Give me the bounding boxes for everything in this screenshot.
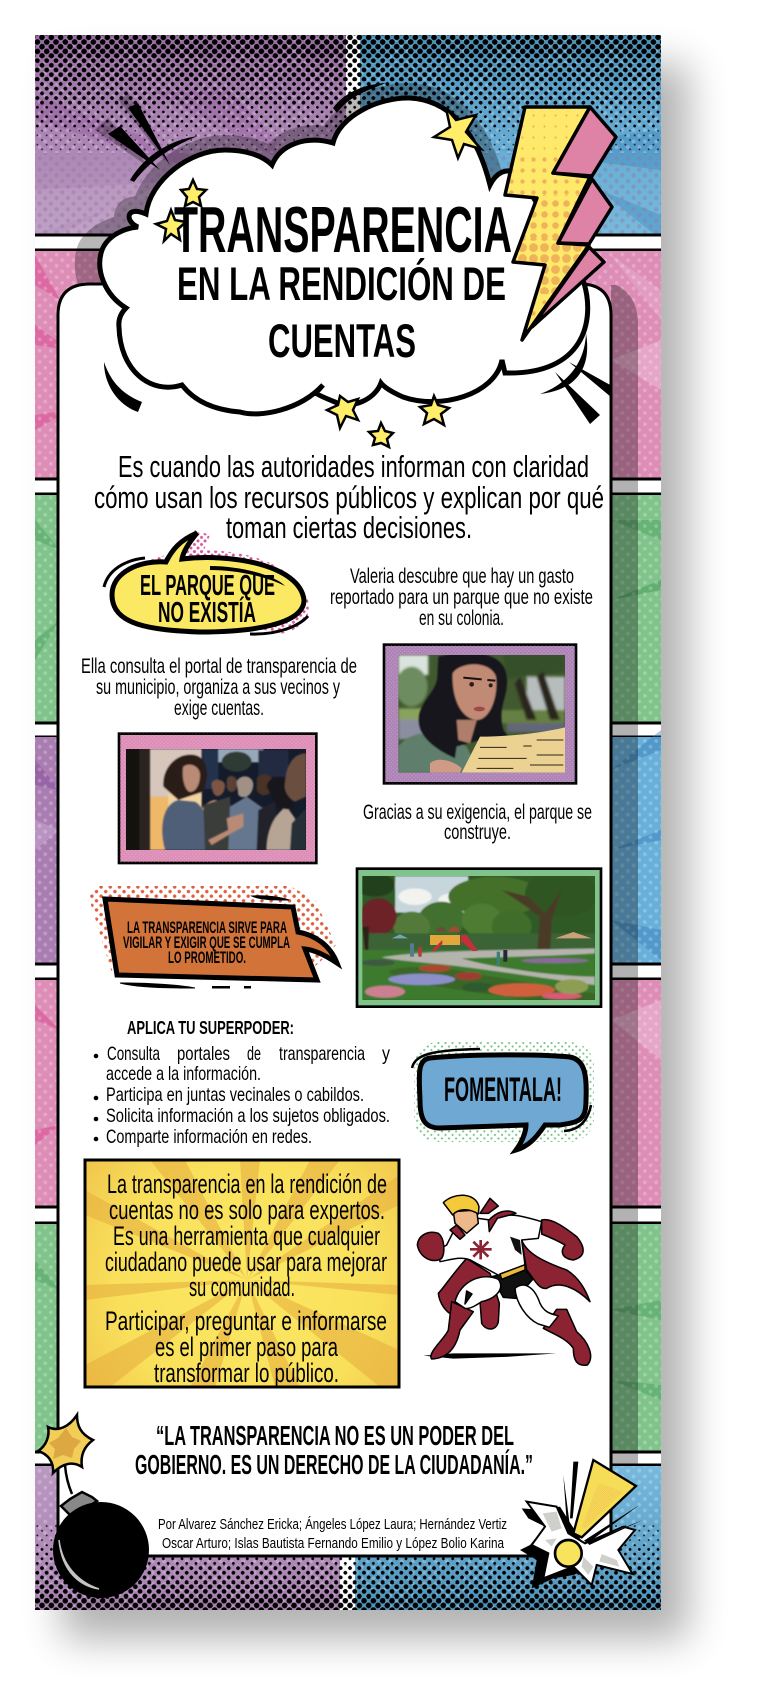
panel: top purple <box>35 35 346 234</box>
stars <box>156 108 481 447</box>
text: Gracias <box>363 801 592 844</box>
cloud <box>100 83 588 414</box>
text: Gracias: construye. <box>444 821 511 844</box>
message text: transformar lo público. <box>154 1358 339 1388</box>
band white <box>25 235 671 250</box>
credits: Oscar Arturo; Islas Bautista Fernando Emilio y López Bolio Karina <box>162 1535 505 1552</box>
message text: Es una herramienta que cualquier <box>113 1221 380 1251</box>
panel: pink row <box>35 251 661 478</box>
panel: pink row 2 <box>35 980 661 1207</box>
message text: cuentas no es solo para expertos. <box>109 1195 385 1225</box>
panel: top blue <box>360 35 661 240</box>
white panel shadow <box>611 285 638 1465</box>
list: superpoder actions: portales <box>177 1043 230 1065</box>
white content panel <box>58 284 611 1556</box>
band white <box>25 1207 671 1223</box>
intro text: toman ciertas decisiones. <box>226 510 472 545</box>
band white <box>25 1452 671 1465</box>
bubble: el parque que no existía <box>104 530 309 634</box>
halftone top dots <box>35 35 661 234</box>
list: superpoder actions: y <box>382 1043 390 1065</box>
title: EN LA RENDICIÓN DE <box>177 257 506 310</box>
message text: La transparencia en la rendición de <box>107 1169 387 1199</box>
bubble: el parque que no existía: NO EXISTÍA <box>158 595 256 629</box>
icon: bomb <box>38 1415 149 1598</box>
callout: la transparencia sirve: LA TRANSPARENCIA SIRVE PARA <box>127 918 287 937</box>
halftone strip top <box>346 35 360 195</box>
bubble: fomentala <box>412 1042 594 1150</box>
message text: su comunidad. <box>189 1272 295 1302</box>
callout: la transparencia sirve <box>88 886 337 988</box>
list: superpoder actions: transparencia <box>279 1043 365 1065</box>
icon: explosion and wedge <box>520 1460 643 1588</box>
message text: Participar, preguntar e informarse <box>105 1306 387 1336</box>
panel: green row <box>35 495 661 722</box>
text: Gracias: Gracias a su exigencia, el parque se <box>363 801 592 824</box>
accent arc left <box>104 362 142 412</box>
text: Valeria: en su colonia. <box>419 607 504 630</box>
list: superpoder actions <box>94 1043 390 1148</box>
band white <box>25 964 671 979</box>
text: Valeria: reportado para un parque que no existe <box>330 586 593 609</box>
cloud shadow <box>90 98 490 330</box>
credits <box>158 1516 507 1552</box>
illustration: superhero <box>417 1195 591 1365</box>
bubble: fomentala: FOMENTALA! <box>444 1071 562 1109</box>
text: Ella consulta <box>81 655 357 720</box>
list: superpoder actions: de <box>247 1043 261 1065</box>
list: superpoder actions: Comparte información en redes. <box>106 1126 312 1148</box>
comic panel background <box>25 35 671 1610</box>
photo: Valeria with document <box>384 645 576 783</box>
text: Valeria: Valeria descubre que hay un gasto <box>350 565 574 588</box>
panel: yellow sunburst message <box>85 1160 399 1388</box>
icon: lightning bolt <box>500 107 616 340</box>
message text: ciudadano puede usar para mejorar <box>105 1247 387 1277</box>
accent arc top <box>333 83 386 113</box>
callout: la transparencia sirve: LO PROMETIDO. <box>168 948 246 967</box>
panel: green row 2 <box>35 1224 661 1452</box>
panel: purple and blue row <box>35 730 661 963</box>
quote: “LA TRANSPARENCIA NO ES UN PODER DEL <box>156 1420 514 1451</box>
message text <box>105 1169 387 1388</box>
band white <box>25 479 671 494</box>
burst lines bottom right <box>540 333 612 424</box>
title: CUENTAS <box>268 314 416 367</box>
text: Valeria <box>330 565 593 630</box>
list: superpoder actions: accede a la información. <box>106 1063 261 1085</box>
text: Ella consulta: su municipio, organiza a sus vecinos y <box>96 676 340 699</box>
poster drop shadow <box>62 64 688 1639</box>
list: superpoder actions: Solicita información a los sujetos obligados. <box>106 1105 390 1127</box>
intro text <box>94 449 604 545</box>
photo: park <box>355 869 601 1007</box>
list: superpoder actions: Participa en juntas vecinales o cabildos. <box>106 1084 364 1106</box>
panel: bottom purple and blue <box>35 1466 661 1610</box>
title <box>174 193 512 367</box>
text: Ella consulta: exige cuentas. <box>174 697 264 720</box>
message text: es el primer paso para <box>155 1332 339 1362</box>
list: superpoder actions: Consulta <box>107 1043 160 1065</box>
band white <box>25 723 671 737</box>
credits: Por Alvarez Sánchez Ericka; Ángeles López Laura; Hernández Vertiz <box>158 1516 507 1533</box>
text: Ella consulta: Ella consulta el portal de transparencia de <box>81 655 357 678</box>
photo: Valeria and neighbours <box>119 734 316 863</box>
heading: aplica tu superpoder: APLICA TU SUPERPODER: <box>127 1018 294 1038</box>
burst lines top left <box>95 93 198 182</box>
title: TRANSPARENCIA <box>174 193 512 266</box>
callout: la transparencia sirve: VIGILAR Y EXIGIR QUE SE CUMPLA <box>123 933 290 952</box>
quote <box>135 1420 533 1480</box>
bubble: el parque que no existía: EL PARQUE QUE <box>140 570 275 602</box>
